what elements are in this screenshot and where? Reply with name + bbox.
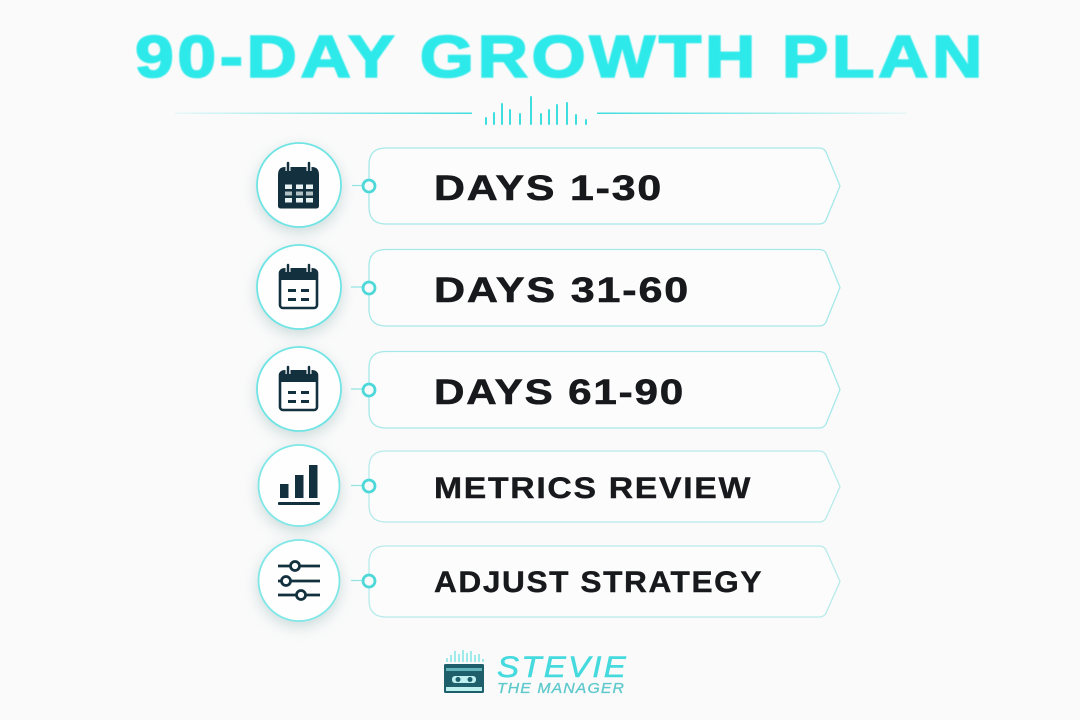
label box 4 — [369, 451, 840, 522]
logo text: stevie: STEVIE — [497, 651, 628, 684]
label text 5: ADJUST STRATEGY — [434, 566, 763, 599]
icon circle 1 — [257, 143, 341, 227]
logo — [444, 650, 628, 697]
connector 5 — [351, 575, 375, 587]
row 2: days 31-60 — [257, 245, 840, 329]
icon circle 3 — [257, 347, 341, 431]
icon circle 4 — [258, 445, 340, 526]
icon: calendar full grid — [278, 163, 319, 208]
label text 3: DAYS 61-90 — [434, 373, 685, 412]
label box 1 — [369, 148, 840, 224]
connector 4 — [351, 480, 375, 492]
label box 3 — [369, 352, 840, 428]
icon circle 2 — [257, 245, 341, 329]
row 4: metrics review — [258, 445, 840, 526]
connector 3 — [351, 384, 375, 396]
title: 90-DAY GROWTH PLAN — [135, 24, 986, 90]
connector 1 — [352, 180, 375, 192]
label text 2: DAYS 31-60 — [434, 271, 690, 310]
icon circle 5 — [258, 540, 340, 621]
label box 5 — [369, 546, 840, 617]
label text 4: METRICS REVIEW — [434, 472, 752, 505]
icon: bar chart — [278, 465, 320, 505]
icon: calendar with rows — [279, 367, 318, 410]
row 3: days 61-90 — [257, 347, 840, 431]
row 5: adjust strategy — [258, 540, 840, 621]
logo text: the manager: THE MANAGER — [497, 681, 625, 697]
connector 2 — [351, 282, 375, 294]
title divider with waveform — [175, 97, 907, 124]
label text 1: DAYS 1-30 — [434, 169, 663, 208]
icon: calendar with rows — [279, 265, 318, 308]
logo icon: waveform cassette — [444, 650, 484, 693]
icon: sliders — [278, 562, 320, 600]
row 1: days 1-30 — [257, 143, 840, 227]
label box 2 — [369, 250, 840, 326]
